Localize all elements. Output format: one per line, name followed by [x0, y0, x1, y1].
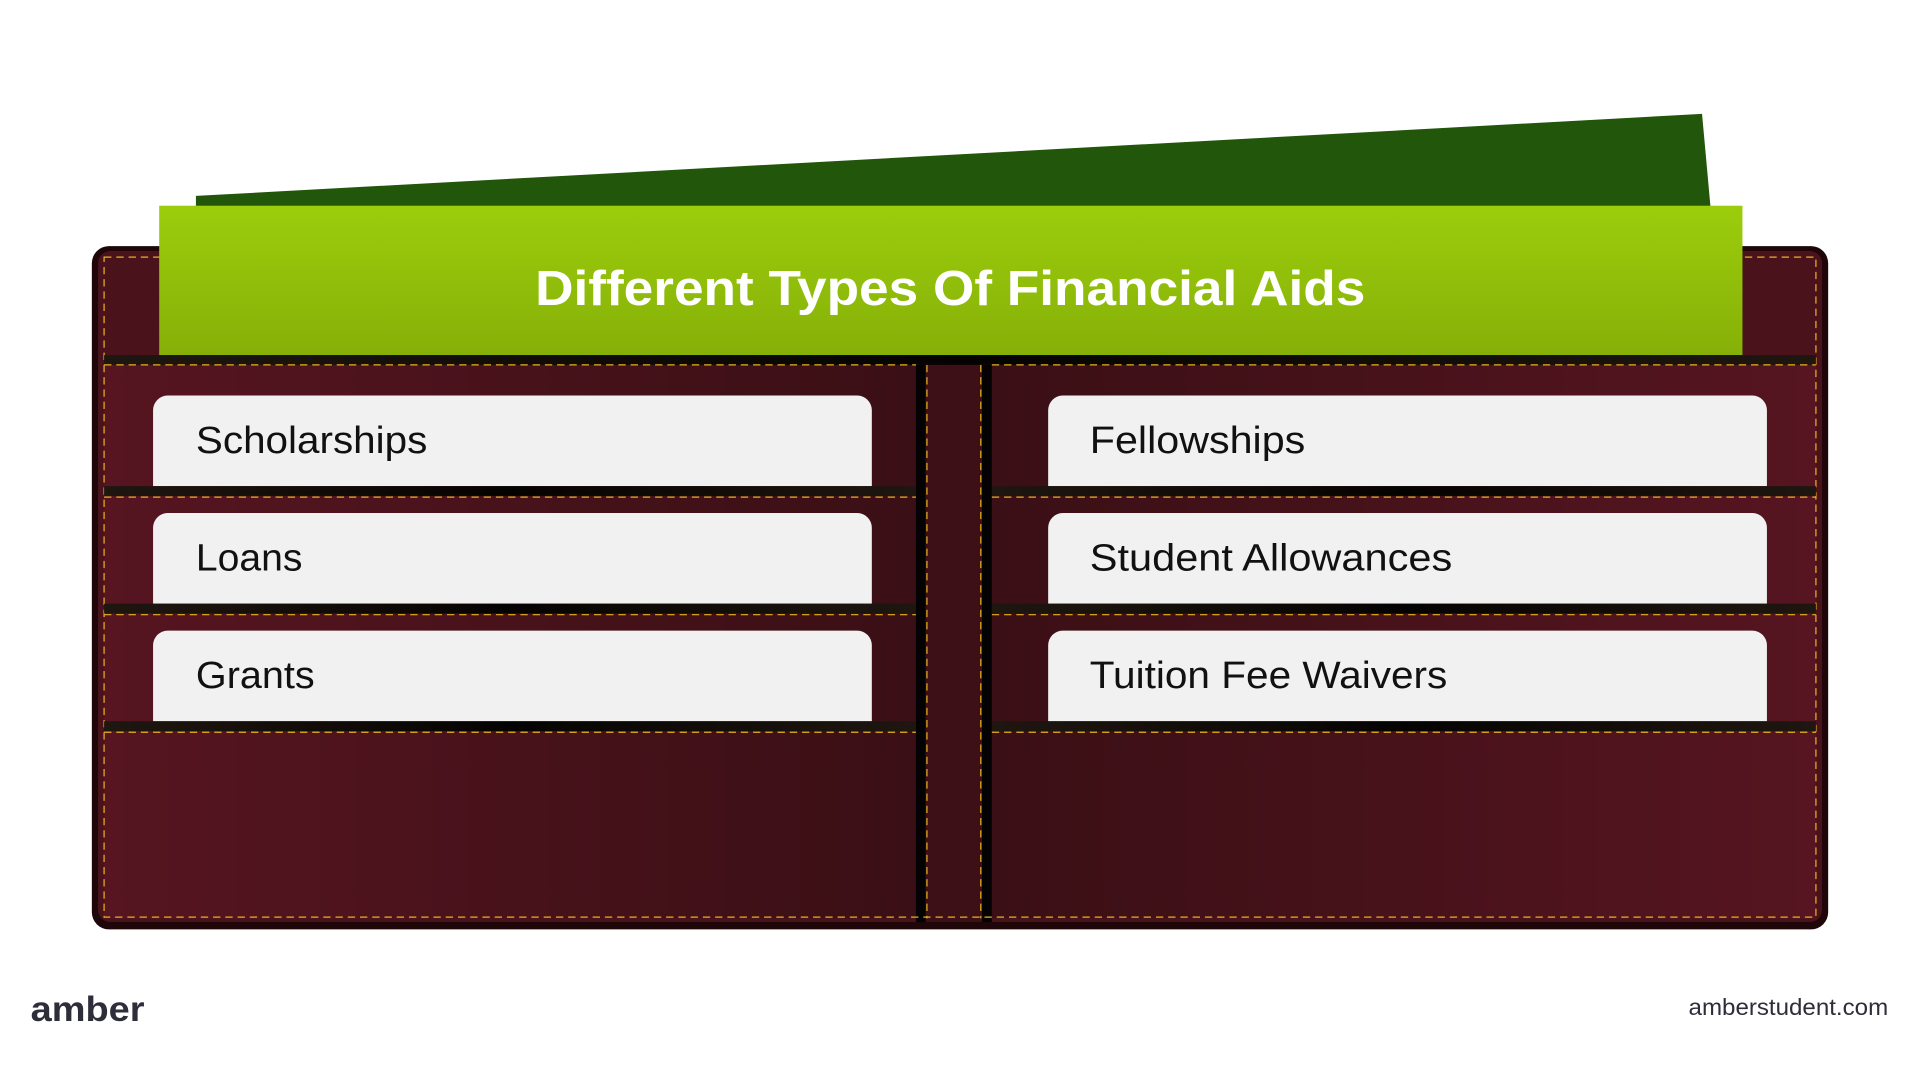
pocket bands: [104, 486, 1816, 732]
card: Student Allowances: Student Allowances: [1090, 538, 1452, 580]
card: Loans: Loans: [196, 538, 302, 580]
website: amberstudent.com: [1689, 994, 1888, 1020]
card: Scholarships: Scholarships: [196, 420, 427, 462]
card: Grants: [153, 631, 872, 721]
card: Fellowships: Fellowships: [1090, 420, 1305, 462]
card: Scholarships: [153, 396, 872, 486]
card: Loans: [153, 513, 872, 604]
left pocket panel: [104, 365, 916, 918]
logo: amber: [31, 989, 145, 1029]
card: Student Allowances: [1048, 513, 1767, 604]
right pocket panel: [992, 365, 1816, 918]
title banner: [159, 206, 1742, 355]
card: Tuition Fee Waivers: Tuition Fee Waivers: [1090, 655, 1447, 697]
title: Different Types Of Financial Aids: [535, 262, 1365, 316]
card: Fellowships: [1048, 396, 1767, 486]
top band: [104, 355, 1816, 365]
card: Tuition Fee Waivers: [1048, 631, 1767, 721]
back paper: [196, 114, 1711, 208]
spine: [916, 365, 992, 922]
card: Grants: Grants: [196, 655, 315, 697]
wallet: [92, 246, 1828, 929]
